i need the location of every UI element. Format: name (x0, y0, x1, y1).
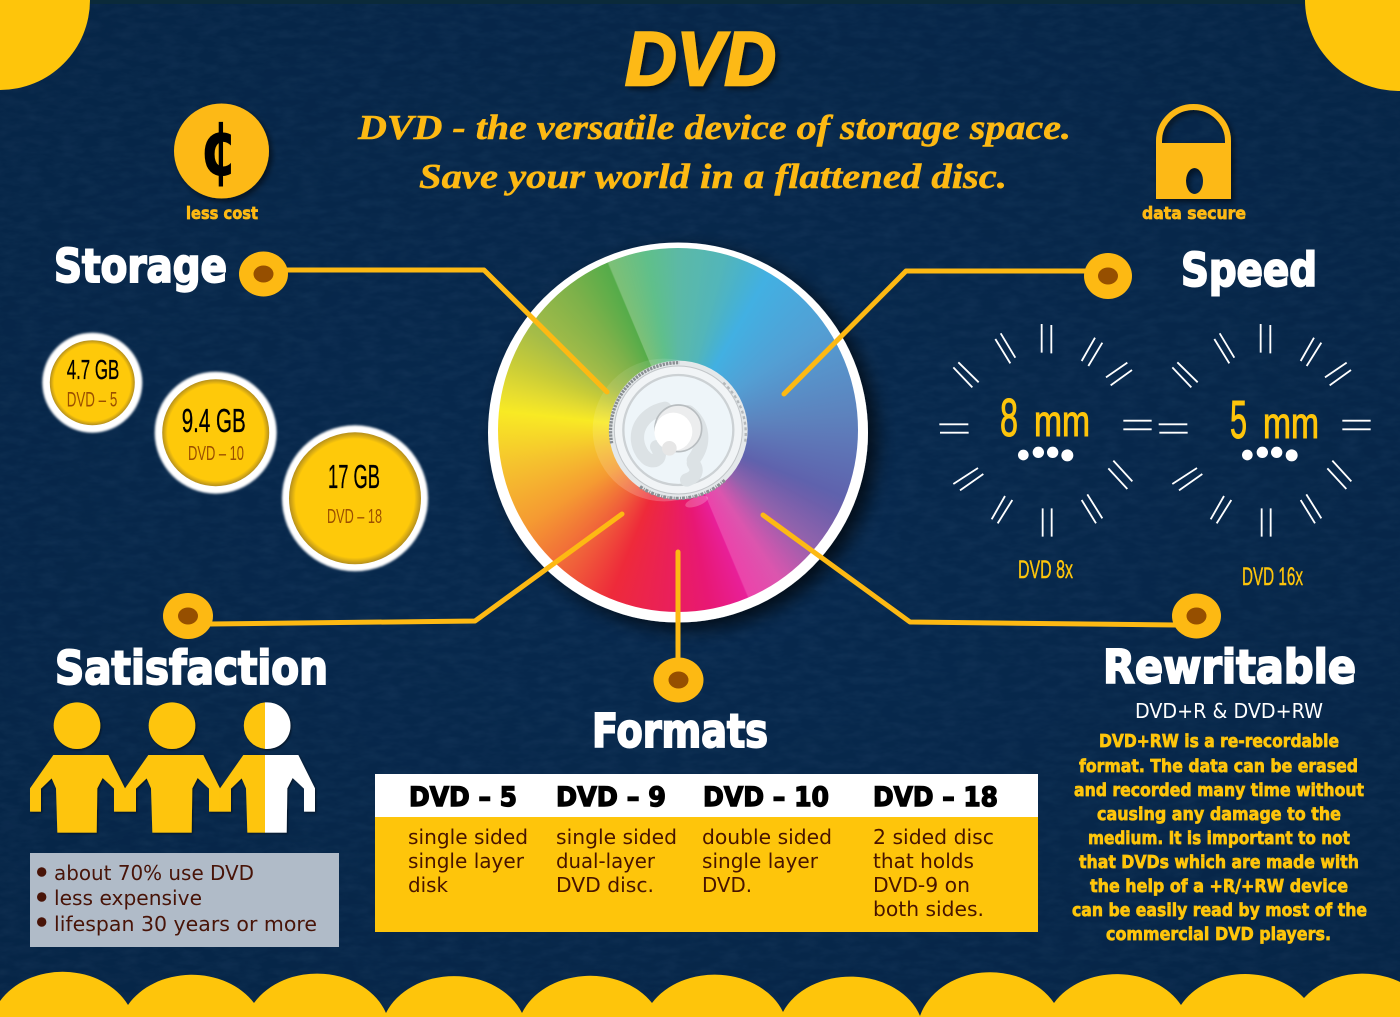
bubble: 9.4 GB (155, 372, 277, 494)
speed dial: 8 mm (939, 324, 1152, 584)
bubble: 17 GB: DVD – 18 (327, 506, 382, 528)
connector: storage (239, 252, 607, 392)
rewritable description: causing any damage to the (1097, 804, 1341, 825)
speed dial: 5 mm: DVD 16x (1242, 563, 1303, 591)
icon: padlock, data secure (1142, 107, 1246, 224)
table column: DVD-9: DVD disc. (556, 873, 654, 897)
table column: DVD-5: single sided (408, 825, 528, 849)
storage bubbles (42, 333, 428, 571)
panel: formats table (375, 774, 1038, 932)
table column: DVD-9 (556, 825, 677, 897)
table column: DVD-5: disk (408, 873, 448, 897)
panel: satisfaction facts (30, 853, 339, 947)
disc (488, 242, 868, 622)
panel: satisfaction facts: about 70% use DVD (54, 861, 254, 885)
rewritable description: DVD+RW is a re-recordable (1099, 731, 1339, 752)
rewritable description (1072, 731, 1367, 945)
title: DVD (625, 17, 776, 102)
person 1 (30, 702, 125, 833)
footer scallops (0, 972, 1400, 1017)
subtitle: Save your world in a flattened disc. (419, 157, 1007, 196)
table column: DVD-18: 2 sided disc (873, 825, 994, 849)
heading: satisfaction: Satisfaction (55, 641, 328, 695)
bubble: 9.4 GB: 9.4 GB (182, 402, 246, 439)
rewritable description: commercial DVD players. (1106, 924, 1331, 945)
bubble: 9.4 GB: DVD – 10 (188, 443, 244, 465)
speed dial: 5 mm (1159, 324, 1371, 591)
heading: rewritable: Rewritable (1103, 640, 1356, 694)
bubble: 17 GB (282, 425, 428, 571)
table column: DVD-9: single sided (556, 825, 677, 849)
bubble: 4.7 GB (42, 333, 142, 433)
person 2 (125, 702, 220, 833)
top right corner decoration (1305, 0, 1400, 91)
connector: speed (784, 253, 1132, 394)
table column: DVD-18: both sides. (873, 897, 984, 921)
heading: formats: Formats (592, 704, 768, 758)
table column: DVD-10: DVD. (702, 873, 752, 897)
connector: formats (654, 552, 704, 702)
icon: coin, less cost: less cost (186, 204, 258, 224)
table column: DVD-5: single layer (408, 849, 525, 873)
table column: DVD-10: double sided (702, 825, 832, 849)
connector: rewritable (763, 515, 1221, 638)
table column: DVD-18: DVD-9 on (873, 873, 970, 897)
table column: DVD-9: dual-layer (556, 849, 656, 873)
bubble: 4.7 GB: 4.7 GB (67, 354, 119, 385)
table headers: DVD – 18 (873, 782, 998, 813)
heading: storage: Storage (54, 239, 227, 293)
speed dial: 8 mm: 8 (1000, 388, 1018, 448)
heading: speed: Speed (1181, 243, 1317, 297)
rewritable subtitle: DVD+R & DVD+RW (1135, 699, 1323, 723)
speed dial: 8 mm: mm (1034, 397, 1090, 446)
connector: satisfaction (163, 514, 622, 639)
rewritable description: the help of a +R/+RW device (1090, 876, 1348, 897)
rewritable description: format. The data can be erased (1079, 756, 1358, 777)
table column: DVD-18 (873, 825, 994, 921)
subtitle (357, 108, 1071, 196)
table headers: DVD – 10 (703, 782, 829, 813)
rewritable description: that DVDs which are made with (1079, 852, 1359, 873)
panel: satisfaction facts: less expensive (54, 886, 202, 910)
icon: padlock, data secure: data secure (1142, 204, 1246, 224)
speed dial: 5 mm: mm (1263, 399, 1319, 448)
rewritable description: and recorded many time without (1074, 780, 1364, 801)
speed dial: 5 mm: 5 (1230, 390, 1247, 450)
rewritable description: medium. It is important to not (1088, 828, 1350, 849)
icon: three people (30, 702, 315, 833)
bubble: 4.7 GB: DVD – 5 (67, 388, 117, 412)
speed dial: 8 mm: DVD 8x (1018, 556, 1073, 584)
top left corner decoration (0, 0, 90, 90)
panel: satisfaction facts: lifespan 30 years or more (54, 912, 317, 936)
icon: coin, less cost: ¢ (200, 104, 238, 193)
table headers: DVD – 5 (409, 782, 517, 813)
bubble: 17 GB: 17 GB (328, 458, 380, 495)
table headers: DVD – 9 (556, 782, 666, 813)
table column: DVD-5 (408, 825, 528, 897)
person 3 half filled (220, 702, 315, 833)
icon: coin, less cost (174, 104, 269, 224)
subtitle: DVD - the versatile device of storage space. (357, 108, 1071, 147)
table column: DVD-10 (702, 825, 832, 897)
table column: DVD-10: single layer (702, 849, 819, 873)
table column: DVD-18: that holds (873, 849, 974, 873)
table headers (409, 782, 998, 813)
